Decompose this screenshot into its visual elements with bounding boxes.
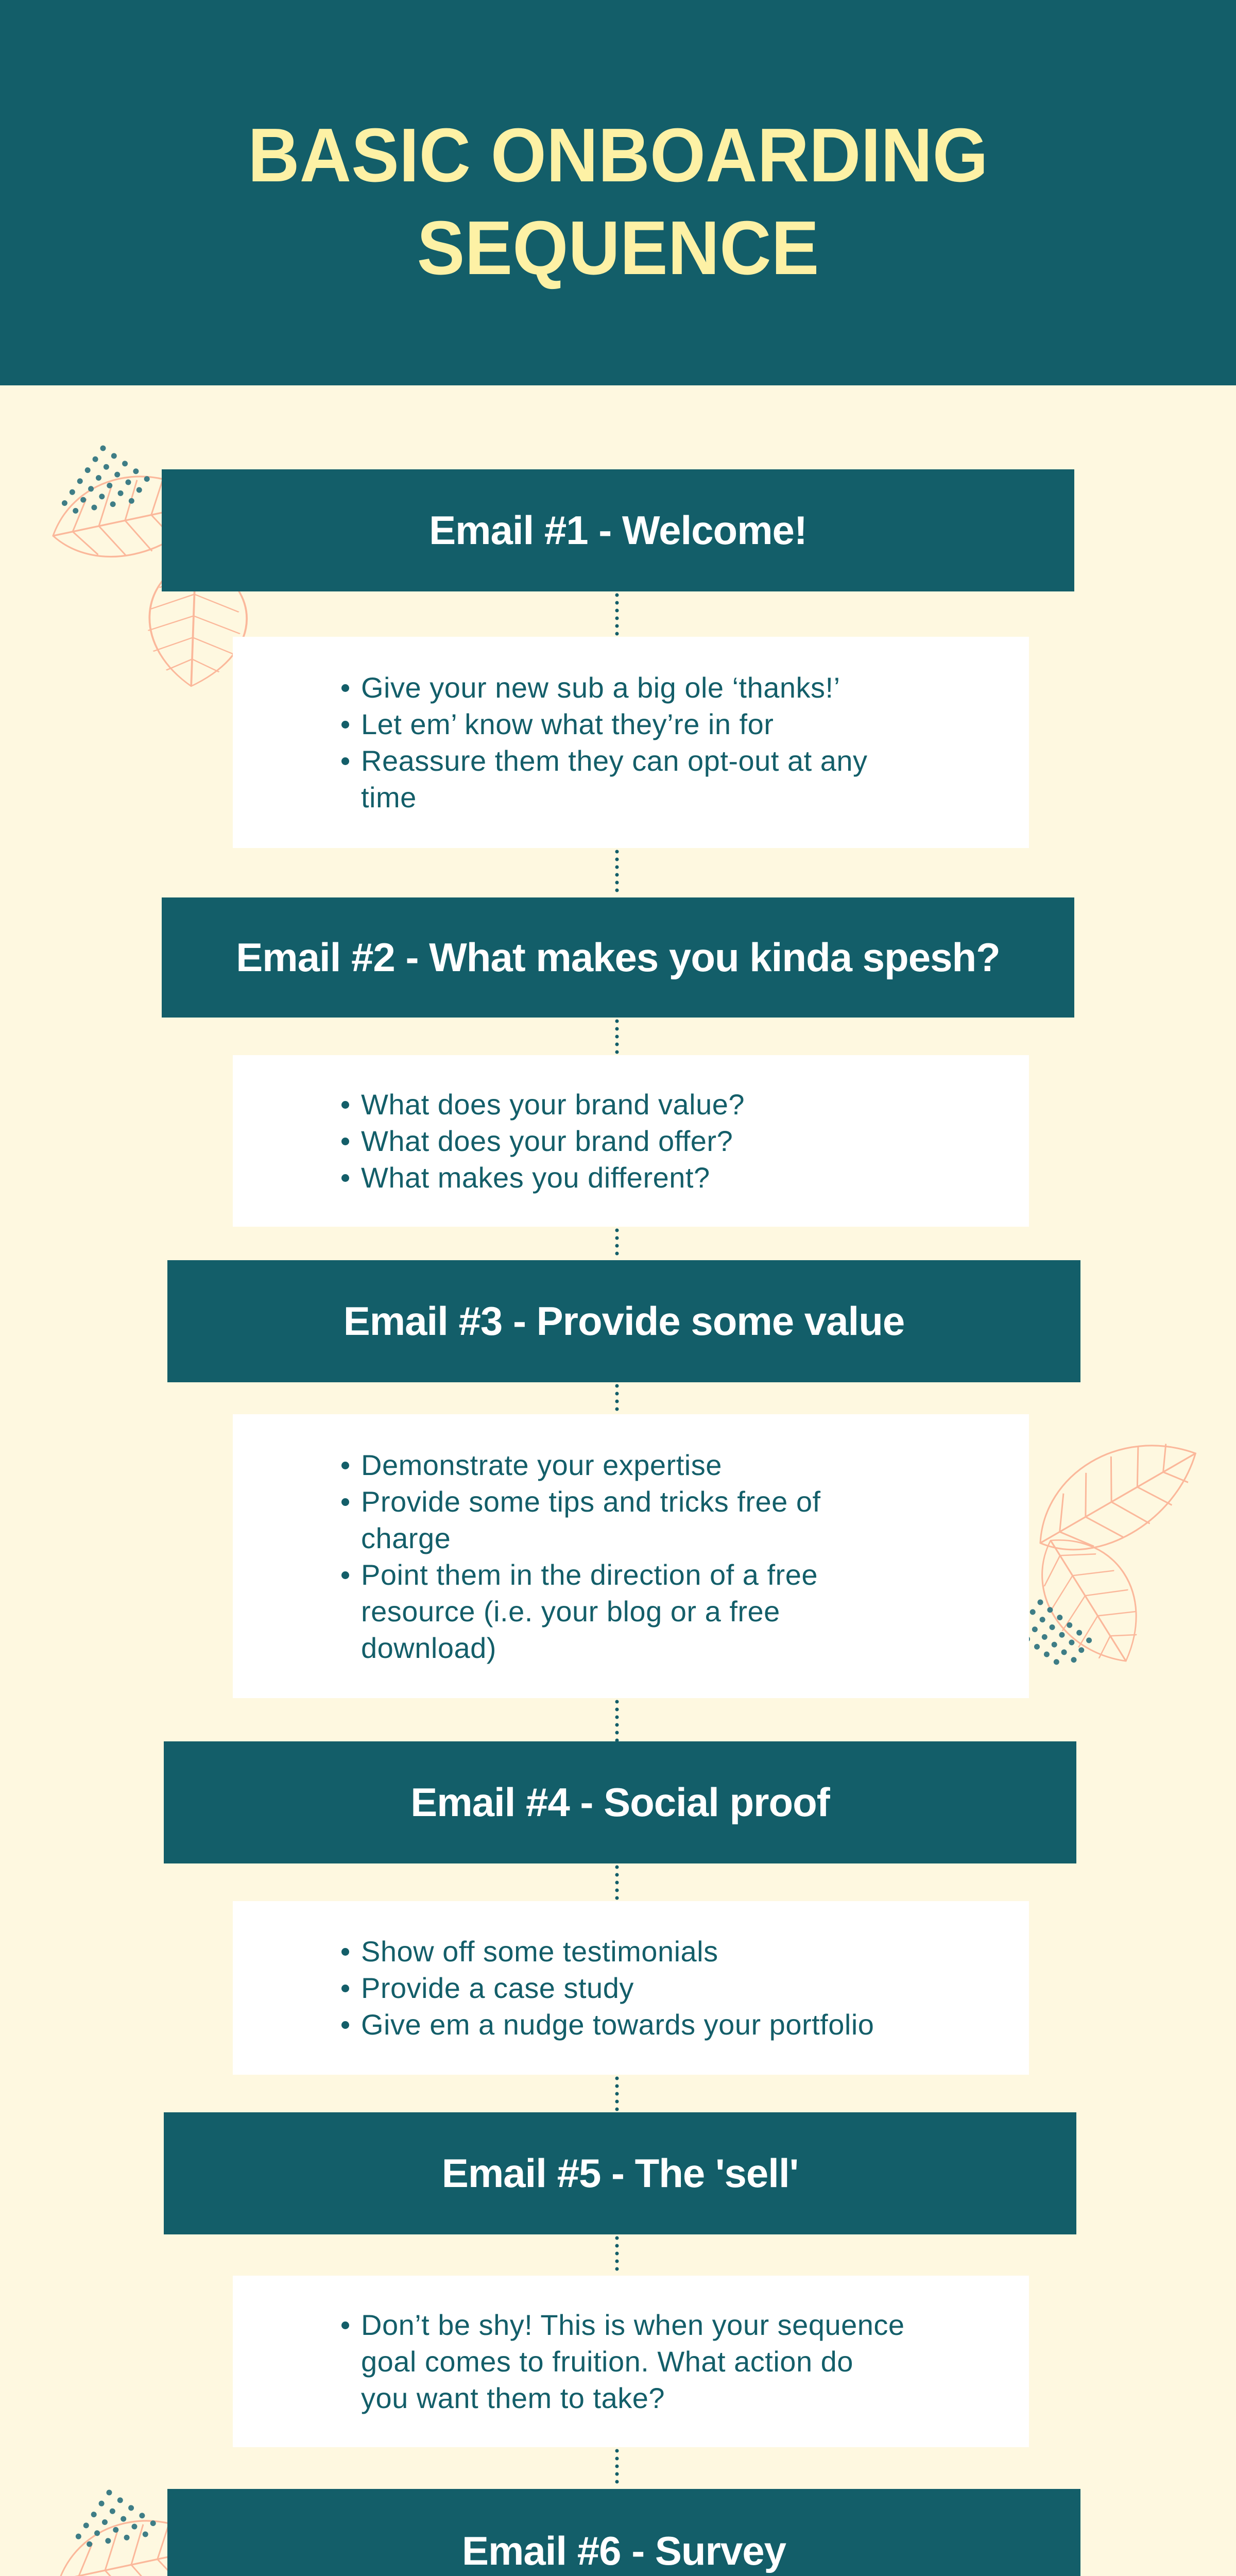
dotted connectors [615,595,619,2576]
content: email 5: you want them to take? [361,2382,665,2414]
content: email 4: Provide a case study [361,1972,634,2004]
content: email 4: Show off some testimonials [361,1935,718,1968]
heading: email 3: Email #3 - Provide some value [344,1298,904,1344]
content: email 2: What does your brand value? [361,1088,745,1121]
heading: email 5: Email #5 - The 'sell' [442,2150,798,2196]
content: email 3: charge [361,1522,451,1554]
content: email 2: What does your brand offer? [361,1125,733,1157]
heading: email 4 [164,1741,1076,1863]
title [248,113,988,291]
title: SEQUENCE [417,206,819,291]
icon: leaves top left [44,444,249,688]
heading: email 1: Email #1 - Welcome! [429,507,807,553]
heading: email 6: Email #6 - Survey [462,2528,786,2573]
content: email 1: Give your new sub a big ole ‘thanks!’ [361,671,840,704]
heading: email 3 [167,1260,1080,1382]
content: email 3: Point them in the direction of a free [361,1558,818,1591]
heading: email 6 [167,2489,1080,2576]
icon: leaves right [1014,1415,1214,1681]
content: email 1: Let em’ know what they’re in for [361,708,774,740]
content: email 5 [233,2276,1029,2447]
content: email 1 [233,637,1029,848]
heading: email 2 [162,897,1074,1018]
content: email 4 [233,1901,1029,2075]
content: email 3: download) [361,1631,496,1664]
icon: leaves bottom left [50,2488,250,2576]
content: email 1: Reassure them they can opt-out at any [361,744,867,777]
content: email 4: Give em a nudge towards your portfolio [361,2008,874,2041]
content: email 3: Demonstrate your expertise [361,1449,722,1481]
header [0,0,1236,385]
content: email 2: What makes you different? [361,1161,710,1194]
content: email 3 [233,1414,1029,1698]
heading: email 1 [162,469,1074,591]
title: BASIC ONBOARDING [248,113,988,198]
heading: email 2: Email #2 - What makes you kinda spesh? [236,935,1000,980]
content: email 1: time [361,781,417,814]
heading: email 4: Email #4 - Social proof [410,1780,830,1825]
content: email 3: resource (i.e. your blog or a free [361,1595,780,1627]
content: email 3: Provide some tips and tricks free of [361,1485,821,1518]
heading: email 5 [164,2112,1076,2234]
content: email 2 [233,1055,1029,1227]
content: email 5: goal comes to fruition. What action do [361,2345,853,2378]
content: email 5: Don’t be shy! This is when your sequence [361,2309,905,2341]
